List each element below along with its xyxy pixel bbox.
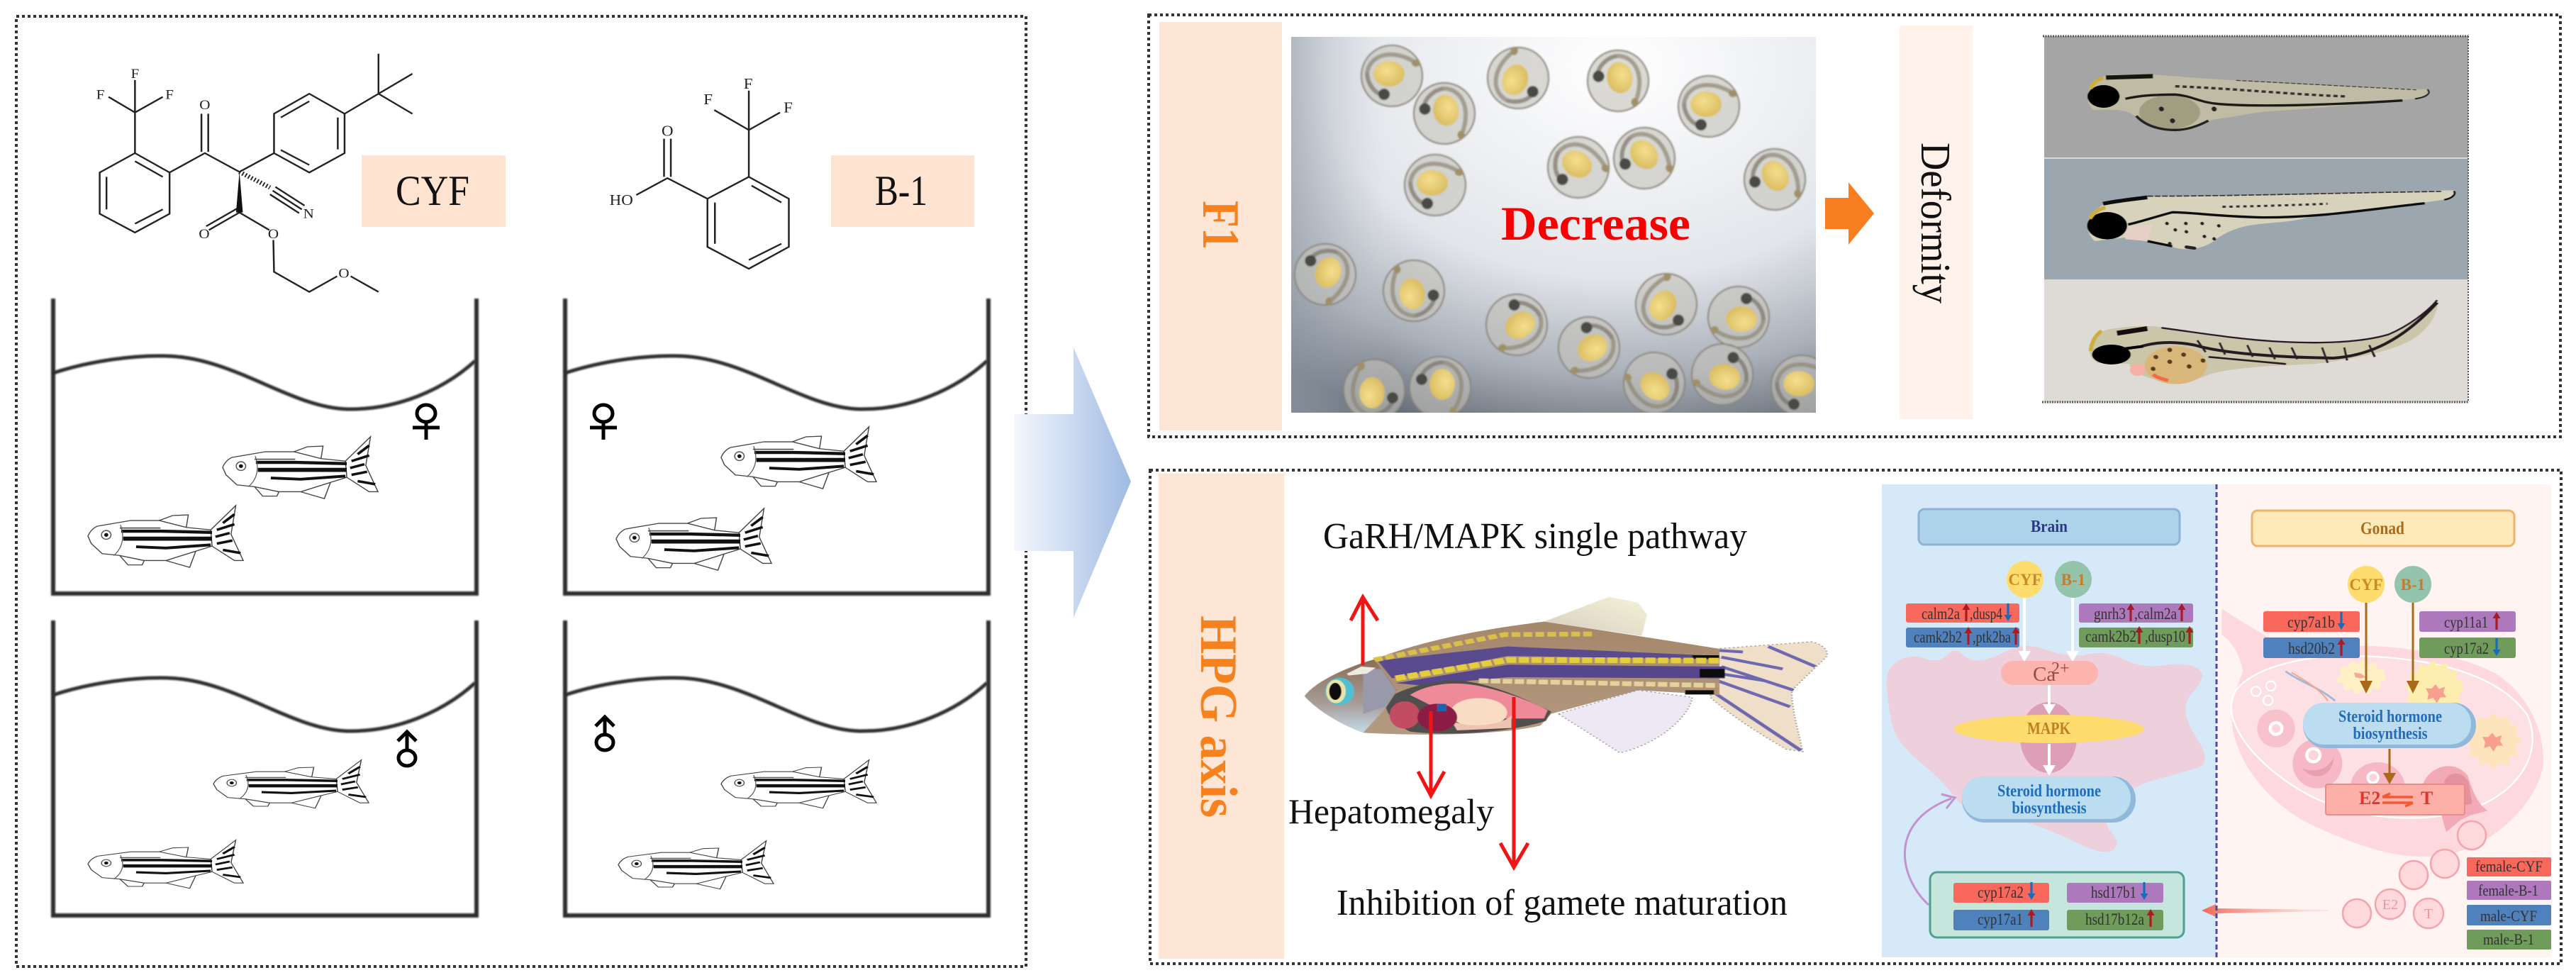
node: CYF: CYF (2349, 576, 2383, 594)
band: Deformity heading: Deformity (1912, 143, 1959, 304)
molecule: CYF: F (165, 87, 174, 102)
genes: camk2b2 dusp10 (2079, 626, 2194, 647)
legend: male-B-1 (2483, 930, 2534, 948)
molecule: B-1: F (703, 91, 713, 108)
genes: calm2a dusp4: calm2a (1922, 605, 1960, 623)
arrow: brain (1351, 597, 1378, 665)
illustration: zebrafish anatomy (1305, 597, 1827, 753)
node: B-1: B-1 (2061, 571, 2085, 589)
genes: gnrh3 calm2a (2079, 603, 2193, 623)
node: steroid hormone biosynthesis (brain) (1962, 776, 2136, 823)
genes: camk2b2 ptk2ba: camk2b2 (1914, 628, 1962, 646)
legend: male-CYF (2480, 907, 2537, 925)
molecule: CYF: O (199, 227, 210, 242)
label: B-1 (831, 155, 974, 227)
legend: female-B-1 (2478, 881, 2538, 899)
node: Ca2+: Ca (2033, 663, 2056, 686)
band: Deformity heading (1900, 26, 1973, 419)
hormone vesicles: T (2424, 906, 2433, 922)
genes: cyp17a2 (2419, 637, 2516, 658)
photos: deformed larvae (2042, 36, 2469, 402)
node: steroid hormone biosynthesis (gonad) (2303, 703, 2476, 748)
tank: CYF male (53, 620, 476, 915)
genes: cyp7a1b (2263, 611, 2360, 632)
band: F1 heading (1159, 22, 1282, 430)
node: E2 and T: T (2421, 788, 2433, 808)
panel: HPG axis (1150, 470, 2561, 964)
arrow: gonad (1500, 697, 1528, 867)
node: steroid hormone biosynthesis (brain): Steroid hormone (1997, 782, 2101, 801)
label: CYF: CYF (396, 167, 469, 214)
molecule: B-1: F (744, 75, 753, 92)
molecule: B-1 (610, 75, 793, 269)
genes: gnrh3 calm2a: ,calm2a (2134, 605, 2177, 623)
text: hepatomegaly: Hepatomegaly (1288, 791, 1494, 831)
label: CYF (362, 155, 506, 227)
panel: brain (1882, 484, 2217, 957)
node: E2 and T (2326, 784, 2465, 815)
label: B-1: B-1 (875, 167, 927, 214)
molecule: CYF: O (268, 227, 279, 242)
nucleus (2020, 702, 2077, 773)
arrows: gonad pathway (2360, 603, 2419, 784)
genes: cyp17a2: cyp17a2 (2444, 640, 2489, 657)
node: Ca2+ (2001, 659, 2098, 686)
photo: embryos (1286, 37, 1832, 426)
panel: exposure (16, 16, 1026, 967)
tank: B-1 female (565, 299, 988, 594)
node: MAPK: MAPK (2027, 720, 2070, 738)
box: shared genes (1930, 872, 2184, 937)
arrows: brain pathway (2018, 598, 2079, 776)
node: CYF (2007, 561, 2043, 598)
genes: camk2b2 ptk2ba (1906, 627, 2019, 647)
band: HPG axis heading (1159, 474, 1284, 959)
node: steroid hormone biosynthesis (gonad): biosynthesis (2353, 725, 2428, 743)
arrow: feedback (1905, 794, 1955, 905)
text: pathway: GaRH/MAPK single pathway (1323, 516, 1747, 557)
molecule: CYF: F (131, 67, 139, 82)
node: steroid hormone biosynthesis (brain): biosynthesis (2012, 799, 2086, 818)
molecule: CYF: F (96, 87, 104, 102)
divider (2215, 484, 2218, 957)
arrow: big blue (1014, 347, 1131, 618)
node: B-1 (2055, 561, 2092, 598)
larva 1 (2087, 74, 2429, 130)
genes: hsd20b2 (2263, 637, 2360, 658)
molecule: B-1: O (662, 122, 674, 139)
node: B-1: B-1 (2401, 576, 2425, 594)
panel: F1 (1149, 15, 2560, 437)
node: E2 and T: E2 (2359, 788, 2380, 808)
genes: calm2a dusp4 (1906, 603, 2019, 623)
genes: calm2a dusp4: ,dusp4 (1970, 605, 2002, 623)
text: gamete: Inhibition of gamete maturation (1337, 883, 1788, 923)
node: B-1 (2394, 566, 2431, 603)
genes: cyp7a1b: cyp7a1b (2287, 613, 2335, 631)
heading: Gonad (2252, 511, 2514, 546)
genes: cyp11a1: cyp11a1 (2444, 613, 2488, 631)
arrow: gonad to brain (2202, 904, 2329, 917)
tank: CYF female (53, 299, 476, 594)
band: F1 heading: F1 (1191, 201, 1249, 250)
molecule: CYF (96, 54, 413, 292)
genes: gnrh3 calm2a: gnrh3 (2094, 605, 2126, 623)
heading: Brain: Brain (2031, 518, 2068, 536)
genes: camk2b2 dusp10: ,dusp10 (2145, 628, 2185, 645)
genes: hsd20b2: hsd20b2 (2288, 640, 2335, 657)
heading: Brain (1919, 509, 2180, 545)
box: shared genes: hsd17b12a (2085, 911, 2144, 928)
node: Ca2+: 2+ (2051, 659, 2070, 678)
node: CYF (2348, 566, 2385, 603)
panel: gonad (2217, 484, 2551, 957)
cell (1886, 646, 2205, 852)
genes: camk2b2 dusp10: camk2b2 (2085, 628, 2136, 645)
node: steroid hormone biosynthesis (gonad): Steroid hormone (2338, 708, 2442, 726)
hormone vesicles: E2 (2382, 897, 2398, 913)
hormone vesicles (2343, 821, 2486, 928)
ovary (2221, 608, 2543, 857)
box: shared genes: cyp17a1 (1978, 911, 2023, 928)
box: shared genes: cyp17a2 (1978, 884, 2024, 901)
genes: camk2b2 ptk2ba: ,ptk2ba (1973, 628, 2011, 646)
legend: female-CYF (2475, 857, 2543, 875)
molecule: CYF: O (338, 266, 350, 281)
photo: embryos: Decrease (1501, 196, 1690, 250)
tank: B-1 male (565, 620, 988, 915)
box: shared genes: hsd17b1 (2091, 884, 2136, 901)
molecule: B-1: HO (610, 191, 633, 208)
band: HPG axis heading: HPG axis (1189, 616, 1247, 818)
larva 2 (2087, 190, 2455, 249)
larva 3 (2089, 300, 2438, 384)
arrow: to deformity (1825, 182, 1874, 245)
molecule: CYF: N (303, 206, 314, 221)
molecule: B-1: F (784, 99, 793, 116)
heading: Gonad: Gonad (2360, 519, 2404, 538)
legend (2467, 857, 2551, 950)
molecule: CYF: O (199, 98, 210, 113)
node: MAPK (1954, 715, 2144, 743)
arrow: liver (1418, 711, 1444, 796)
node: CYF: CYF (2008, 571, 2042, 589)
genes: cyp11a1 (2419, 611, 2516, 632)
